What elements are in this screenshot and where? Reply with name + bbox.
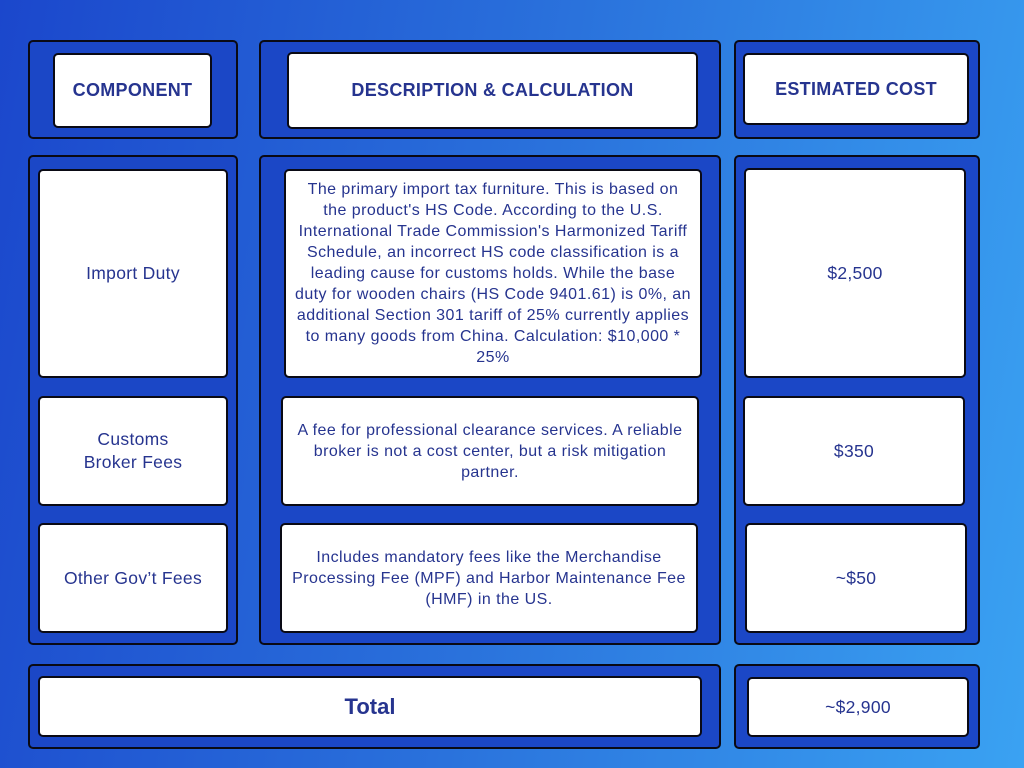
text: import duty description: the product's HS Code. According to the U.S. bbox=[323, 202, 663, 219]
panel: description header bbox=[259, 40, 721, 139]
panel: costs column bbox=[734, 155, 980, 645]
heading: estimated cost bbox=[743, 53, 969, 125]
label: other gov't fees: Other Gov’t Fees bbox=[64, 568, 202, 588]
text: import duty description: International Trade Commission's Harmonized Tariff bbox=[299, 223, 687, 240]
label: customs broker fees: Broker Fees bbox=[84, 452, 182, 472]
text: import duty description: additional Section 301 tariff of 25% currently applies bbox=[297, 307, 689, 324]
value: total cost bbox=[747, 677, 969, 737]
value: import duty cost: $2,500 bbox=[827, 262, 883, 282]
text: broker description: broker is not a cost center, but a risk mitigation bbox=[314, 442, 666, 460]
heading: description & calculation: DESCRIPTION & CALCULATION bbox=[351, 80, 634, 100]
text: import duty description: to many goods from China. Calculation: $10,000 * bbox=[306, 328, 680, 345]
panel: total bbox=[28, 664, 721, 749]
heading: total bbox=[38, 676, 702, 737]
text: other fees description: Includes mandatory fees like the Merchandise bbox=[316, 548, 662, 566]
value: broker cost bbox=[743, 396, 965, 506]
label: import duty bbox=[38, 169, 228, 378]
value: other fees cost: ~$50 bbox=[836, 568, 876, 588]
text: import duty description: duty for wooden chairs (HS Code 9401.61) is 0%, an bbox=[295, 286, 691, 303]
heading: estimated cost: ESTIMATED COST bbox=[775, 78, 937, 98]
value: broker cost: $350 bbox=[834, 440, 874, 460]
panel: components column bbox=[28, 155, 238, 645]
text: import duty description bbox=[284, 169, 702, 378]
heading: description & calculation bbox=[287, 52, 698, 129]
label: customs broker fees bbox=[38, 396, 228, 506]
panel: descriptions column bbox=[259, 155, 721, 645]
heading: component bbox=[53, 53, 212, 128]
value: total cost: ~$2,900 bbox=[825, 696, 891, 716]
text: import duty description: Schedule, an incorrect HS code classification is a bbox=[307, 244, 679, 261]
text: other fees description: (HMF) in the US. bbox=[425, 590, 553, 608]
text: broker description: A fee for professional clearance services. A reliable bbox=[298, 422, 682, 438]
text: other fees description: Processing Fee (MPF) and Harbor Maintenance Fee bbox=[292, 570, 686, 586]
panel: cost header bbox=[734, 40, 980, 139]
heading: total: Total bbox=[345, 694, 395, 718]
text: broker description bbox=[281, 396, 699, 506]
label: import duty: Import Duty bbox=[86, 263, 180, 283]
text: import duty description: 25% bbox=[476, 349, 510, 366]
text: broker description: partner. bbox=[461, 464, 519, 480]
heading: component: COMPONENT bbox=[73, 80, 192, 100]
label: customs broker fees: Customs bbox=[97, 429, 169, 449]
text: import duty description: The primary import tax furniture. This is based on bbox=[308, 181, 678, 198]
label: other gov't fees bbox=[38, 523, 228, 633]
panel: component header bbox=[28, 40, 238, 139]
value: import duty cost bbox=[744, 168, 966, 378]
text: other fees description bbox=[280, 523, 698, 633]
value: other fees cost bbox=[745, 523, 967, 633]
text: import duty description: leading cause for customs holds. While the base bbox=[311, 265, 675, 282]
panel: total cost bbox=[734, 664, 980, 749]
